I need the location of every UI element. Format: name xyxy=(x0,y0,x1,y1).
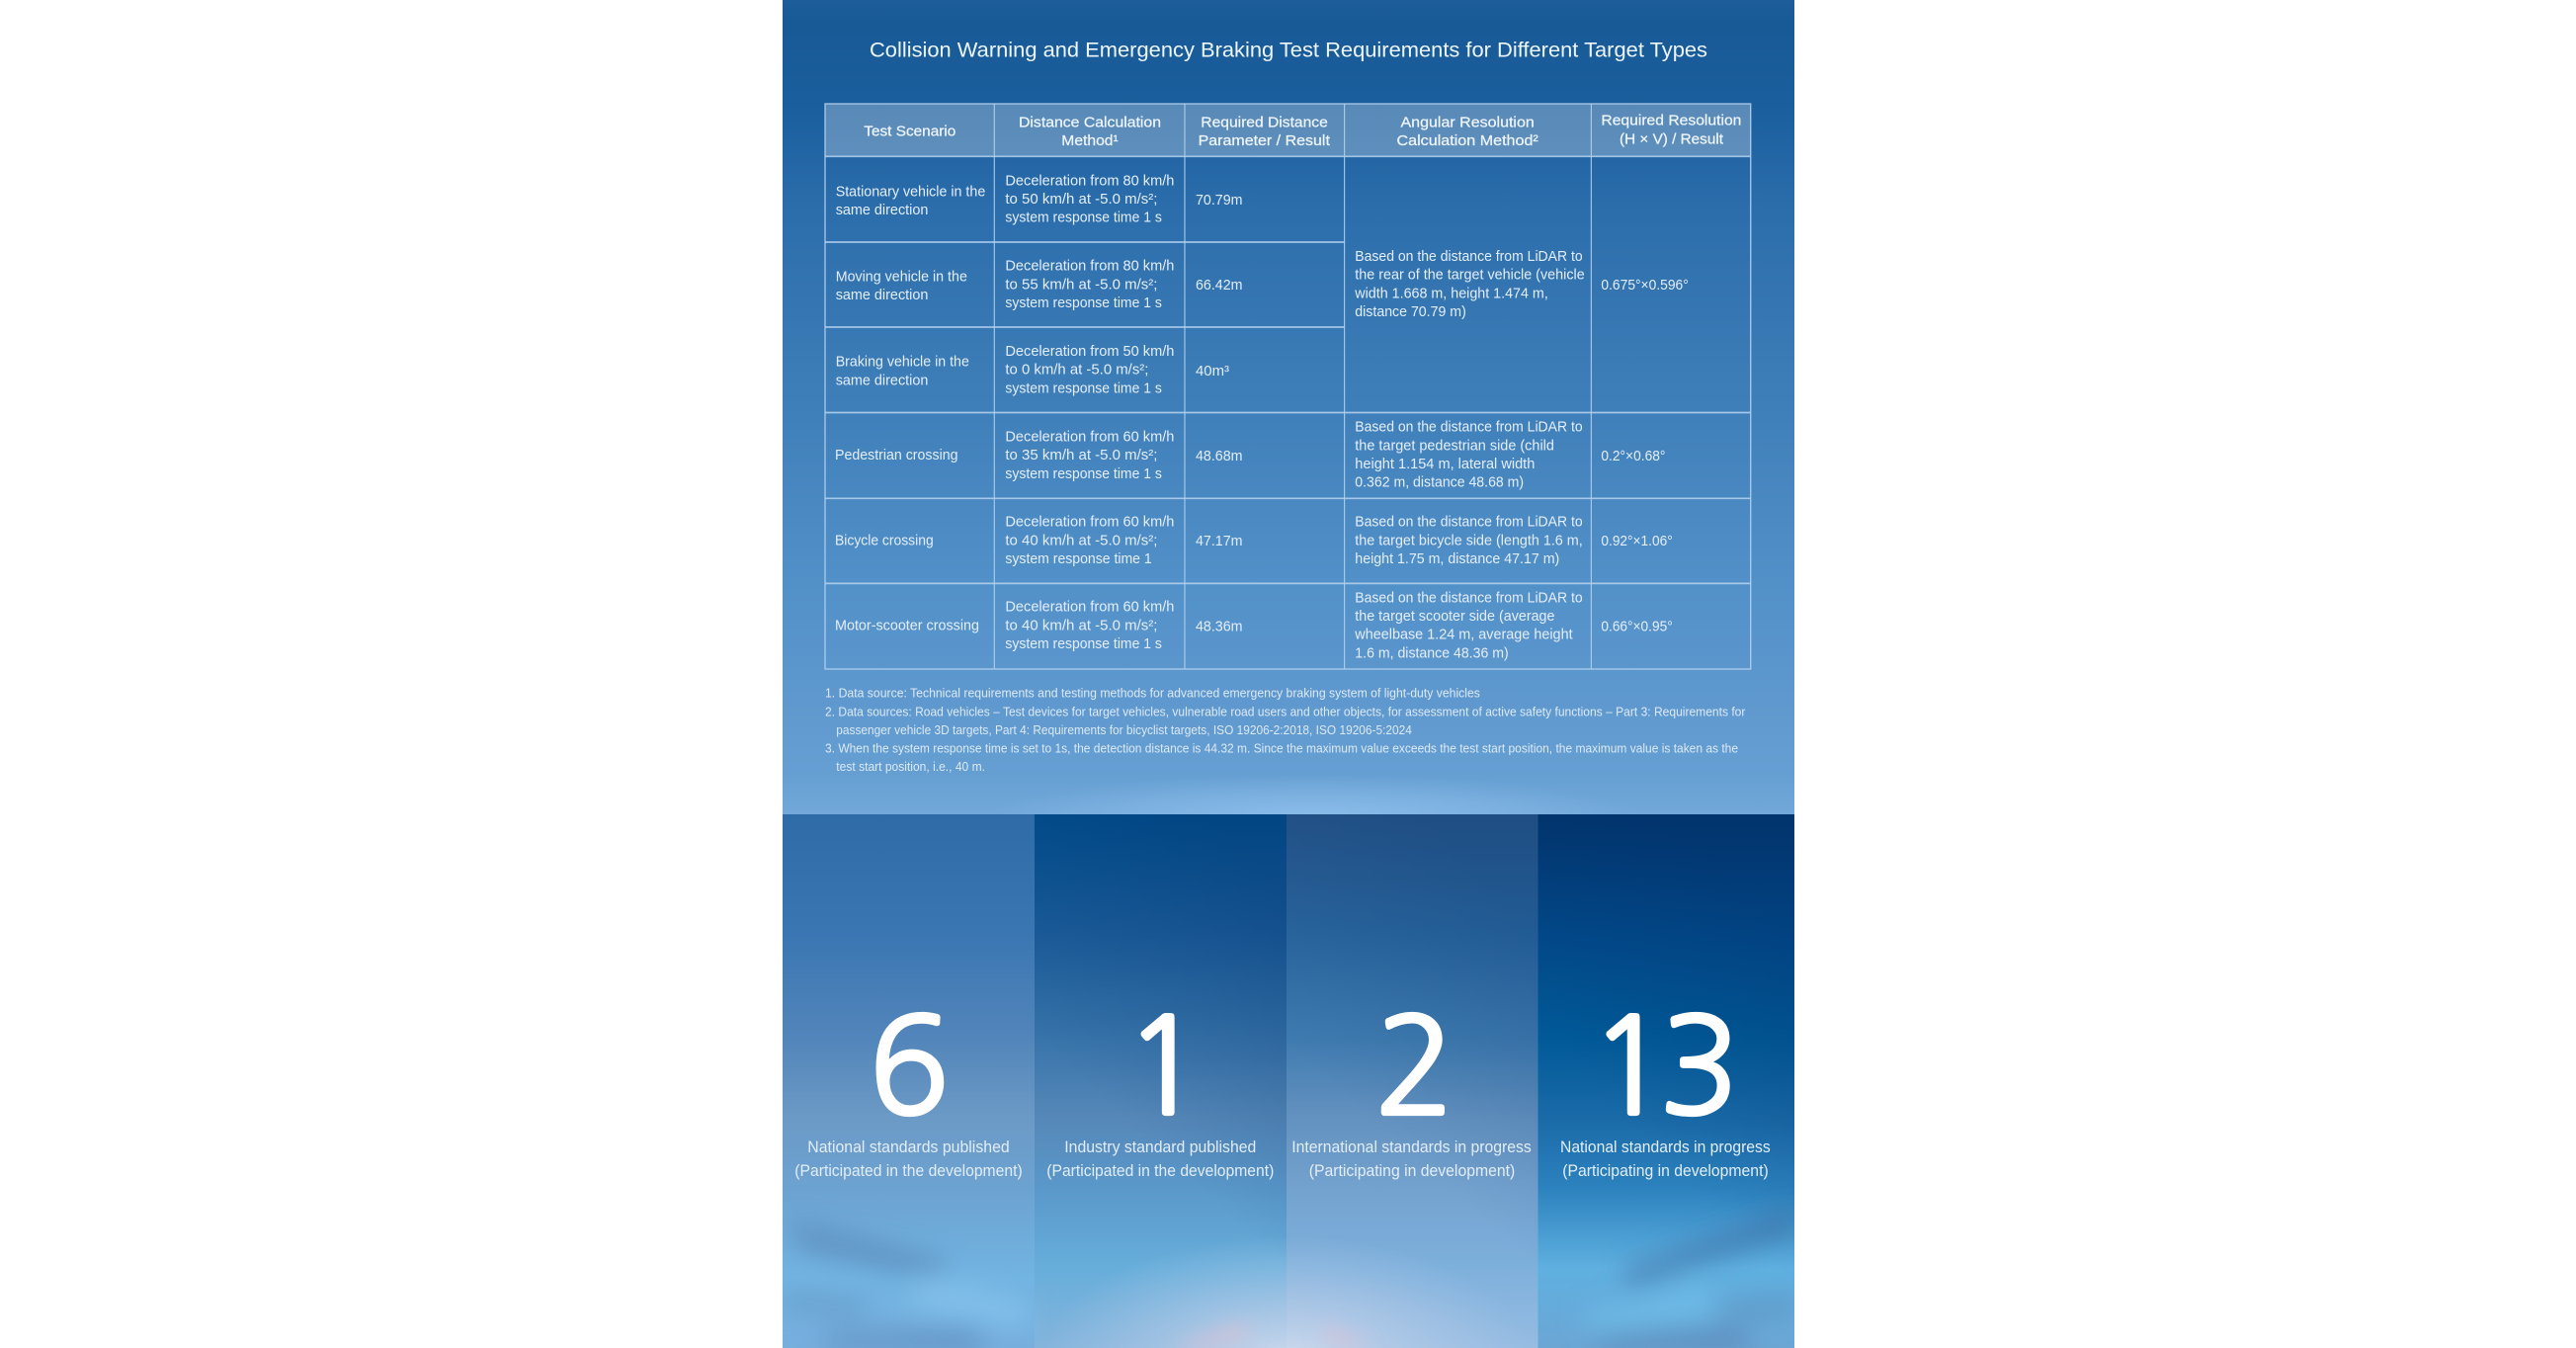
row: motor-scooter crossing: Based on the distance from LiDAR to xyxy=(1355,590,1583,606)
panel: sky statistics background xyxy=(783,814,1794,1348)
row: motor-scooter crossing: 0.66°×0.95° xyxy=(1601,619,1673,634)
table header row: Required Distance xyxy=(1201,114,1328,130)
row: motor-scooter crossing: Deceleration from 60 km/h xyxy=(1005,600,1174,616)
table header row: Method¹ xyxy=(1061,132,1119,149)
pink highlights xyxy=(1171,1324,1373,1348)
merged cell: vehicle angular resolution: 0.675°×0.596° xyxy=(1601,278,1689,294)
row: motor-scooter crossing: wheelbase 1.24 m, average height xyxy=(1354,628,1573,643)
row: motor-scooter crossing: system response time 1 s xyxy=(1005,636,1162,652)
footnotes: 2. Data sources: Road vehicles – Test devices for target vehicles, vulnerable road users and other objects, for assessment of active safety functions – Part 3: Requirements for xyxy=(825,705,1745,718)
row: braking vehicle: system response time 1 s xyxy=(1005,380,1162,396)
stat: 1 industry standard published: Industry standard published xyxy=(1064,1138,1256,1156)
footnotes: test start position, i.e., 40 m. xyxy=(836,760,985,774)
row: bicycle crossing: the target bicycle side (length 1.6 m, xyxy=(1355,533,1583,548)
title: Collision Warning and Emergency Braking Test Requirements for Different Target Types xyxy=(870,40,1707,61)
row: braking vehicle: Deceleration from 50 km/h xyxy=(1005,344,1174,360)
row: moving vehicle: Deceleration from 80 km/h xyxy=(1005,259,1174,275)
row: stationary vehicle: 70.79m xyxy=(1196,193,1243,209)
footnotes: 1. Data source: Technical requirements and testing methods for advanced emergency braking system of light-duty vehicles xyxy=(825,687,1480,701)
row: braking vehicle: 40m³ xyxy=(1196,364,1229,379)
panel: requirements table xyxy=(825,104,1751,669)
row: moving vehicle: same direction xyxy=(836,288,928,303)
row: pedestrian crossing: height 1.154 m, lateral width xyxy=(1355,457,1535,472)
table header row: Distance Calculation xyxy=(1019,114,1161,130)
merged cell: vehicle angular resolution: Based on the distance from LiDAR to xyxy=(1355,249,1583,265)
row: stationary vehicle: same direction xyxy=(836,203,928,218)
row: pedestrian crossing: to 35 km/h at -5.0 m/s²; xyxy=(1005,448,1157,463)
stat: 6 national standards published: 6 xyxy=(869,1000,950,1134)
stat: 6 national standards published xyxy=(794,1000,1023,1180)
merged cell: vehicle angular resolution: the rear of the target vehicle (vehicle xyxy=(1355,268,1585,284)
left clouds xyxy=(783,1222,1028,1348)
row: motor-scooter crossing: 48.36m xyxy=(1196,619,1243,634)
right clouds xyxy=(1601,1212,1794,1348)
row: pedestrian crossing: 48.68m xyxy=(1196,449,1243,464)
row: bicycle crossing: Deceleration from 60 km/h xyxy=(1005,515,1174,531)
row: stationary vehicle: to 50 km/h at -5.0 m/s²; xyxy=(1005,192,1157,208)
row: pedestrian crossing: Pedestrian crossing xyxy=(835,448,958,463)
row: pedestrian crossing: system response time 1 s xyxy=(1005,466,1162,482)
row: bicycle crossing: 0.92°×1.06° xyxy=(1601,534,1673,549)
row: braking vehicle: to 0 km/h at -5.0 m/s²; xyxy=(1005,363,1148,379)
stat: 13 national standards in progress xyxy=(1560,1000,1771,1180)
row: moving vehicle: to 55 km/h at -5.0 m/s²; xyxy=(1005,277,1157,293)
table header row: Calculation Method² xyxy=(1397,132,1538,149)
row: motor-scooter crossing xyxy=(835,590,1673,661)
row: bicycle crossing: Bicycle crossing xyxy=(835,533,934,548)
row: motor-scooter crossing: to 40 km/h at -5.0 m/s²; xyxy=(1005,618,1157,633)
table header row: Test Scenario xyxy=(864,123,956,139)
row: motor-scooter crossing: the target scooter side (average xyxy=(1355,609,1555,625)
row: bicycle crossing xyxy=(835,515,1673,567)
table header row: Required Resolution xyxy=(1601,113,1741,129)
row: pedestrian crossing: 0.362 m, distance 48.68 m) xyxy=(1355,475,1524,491)
footnotes: passenger vehicle 3D targets, Part 4: Requirements for bicyclist targets, ISO 19206-2:2018, ISO 19206-5:2024 xyxy=(836,723,1412,737)
row: pedestrian crossing: Deceleration from 60 km/h xyxy=(1005,429,1174,445)
merged cell: vehicle angular resolution: width 1.668 m, height 1.474 m, xyxy=(1354,286,1548,301)
row: pedestrian crossing xyxy=(835,420,1665,491)
row: pedestrian crossing: 0.2°×0.68° xyxy=(1601,449,1665,464)
merged cell: vehicle angular resolution xyxy=(1354,249,1689,320)
stat: 13 national standards in progress: National standards in progress xyxy=(1560,1138,1771,1156)
stat: 1 industry standard published: 1 xyxy=(1123,1000,1205,1134)
row: bicycle crossing: Based on the distance from LiDAR to xyxy=(1355,515,1583,531)
stat: 6 national standards published: National standards published xyxy=(807,1138,1010,1156)
row: bicycle crossing: to 40 km/h at -5.0 m/s²; xyxy=(1005,533,1157,548)
table header row: (H × V) / Result xyxy=(1620,130,1724,147)
row: pedestrian crossing: Based on the distance from LiDAR to xyxy=(1355,420,1583,436)
table header row xyxy=(825,104,1751,156)
centre glow xyxy=(1077,1248,1480,1348)
row: moving vehicle: system response time 1 s xyxy=(1005,295,1162,311)
row: moving vehicle xyxy=(836,259,1243,311)
row: pedestrian crossing: the target pedestrian side (child xyxy=(1355,438,1554,454)
row: braking vehicle xyxy=(836,344,1229,396)
stat: 1 industry standard published: (Participated in the development) xyxy=(1046,1162,1274,1180)
row: motor-scooter crossing: 1.6 m, distance 48.36 m) xyxy=(1355,645,1509,661)
row: braking vehicle: Braking vehicle in the xyxy=(836,355,969,371)
row: moving vehicle: Moving vehicle in the xyxy=(836,269,967,285)
row: moving vehicle: 66.42m xyxy=(1196,278,1243,294)
row: braking vehicle: same direction xyxy=(836,373,928,388)
stat: 1 industry standard published xyxy=(1046,1000,1274,1180)
stat: 13 national standards in progress: (Participating in development) xyxy=(1562,1162,1769,1180)
footnotes: 3. When the system response time is set to 1s, the detection distance is 44.32 m. Since the maximum value exceeds the test start position, the maximum value is taken as the xyxy=(825,742,1738,756)
merged cell: vehicle angular resolution: distance 70.79 m) xyxy=(1355,304,1466,320)
stat: 2 international standards in progress: International standards in progress xyxy=(1291,1138,1532,1156)
row: stationary vehicle: Deceleration from 80 km/h xyxy=(1005,173,1174,189)
row: stationary vehicle: Stationary vehicle in the xyxy=(836,184,985,200)
row: bicycle crossing: height 1.75 m, distance 47.17 m) xyxy=(1355,551,1559,567)
stat: 13 national standards in progress: 13 xyxy=(1589,1000,1740,1134)
row: motor-scooter crossing: Motor-scooter crossing xyxy=(835,618,979,633)
stat: 2 international standards in progress: 2 xyxy=(1374,1000,1455,1134)
panel: table section background xyxy=(783,0,1794,814)
row: stationary vehicle: system response time 1 s xyxy=(1005,211,1162,226)
stat: 6 national standards published: (Participated in the development) xyxy=(794,1162,1023,1180)
table header row: Angular Resolution xyxy=(1401,114,1535,130)
row: bicycle crossing: system response time 1 xyxy=(1005,551,1152,567)
table header row: Parameter / Result xyxy=(1199,132,1331,149)
stat: 2 international standards in progress: (Participating in development) xyxy=(1309,1162,1515,1180)
row: bicycle crossing: 47.17m xyxy=(1196,534,1243,549)
footnotes xyxy=(825,687,1745,774)
stat: 2 international standards in progress xyxy=(1291,1000,1532,1180)
row: stationary vehicle xyxy=(836,173,1243,226)
